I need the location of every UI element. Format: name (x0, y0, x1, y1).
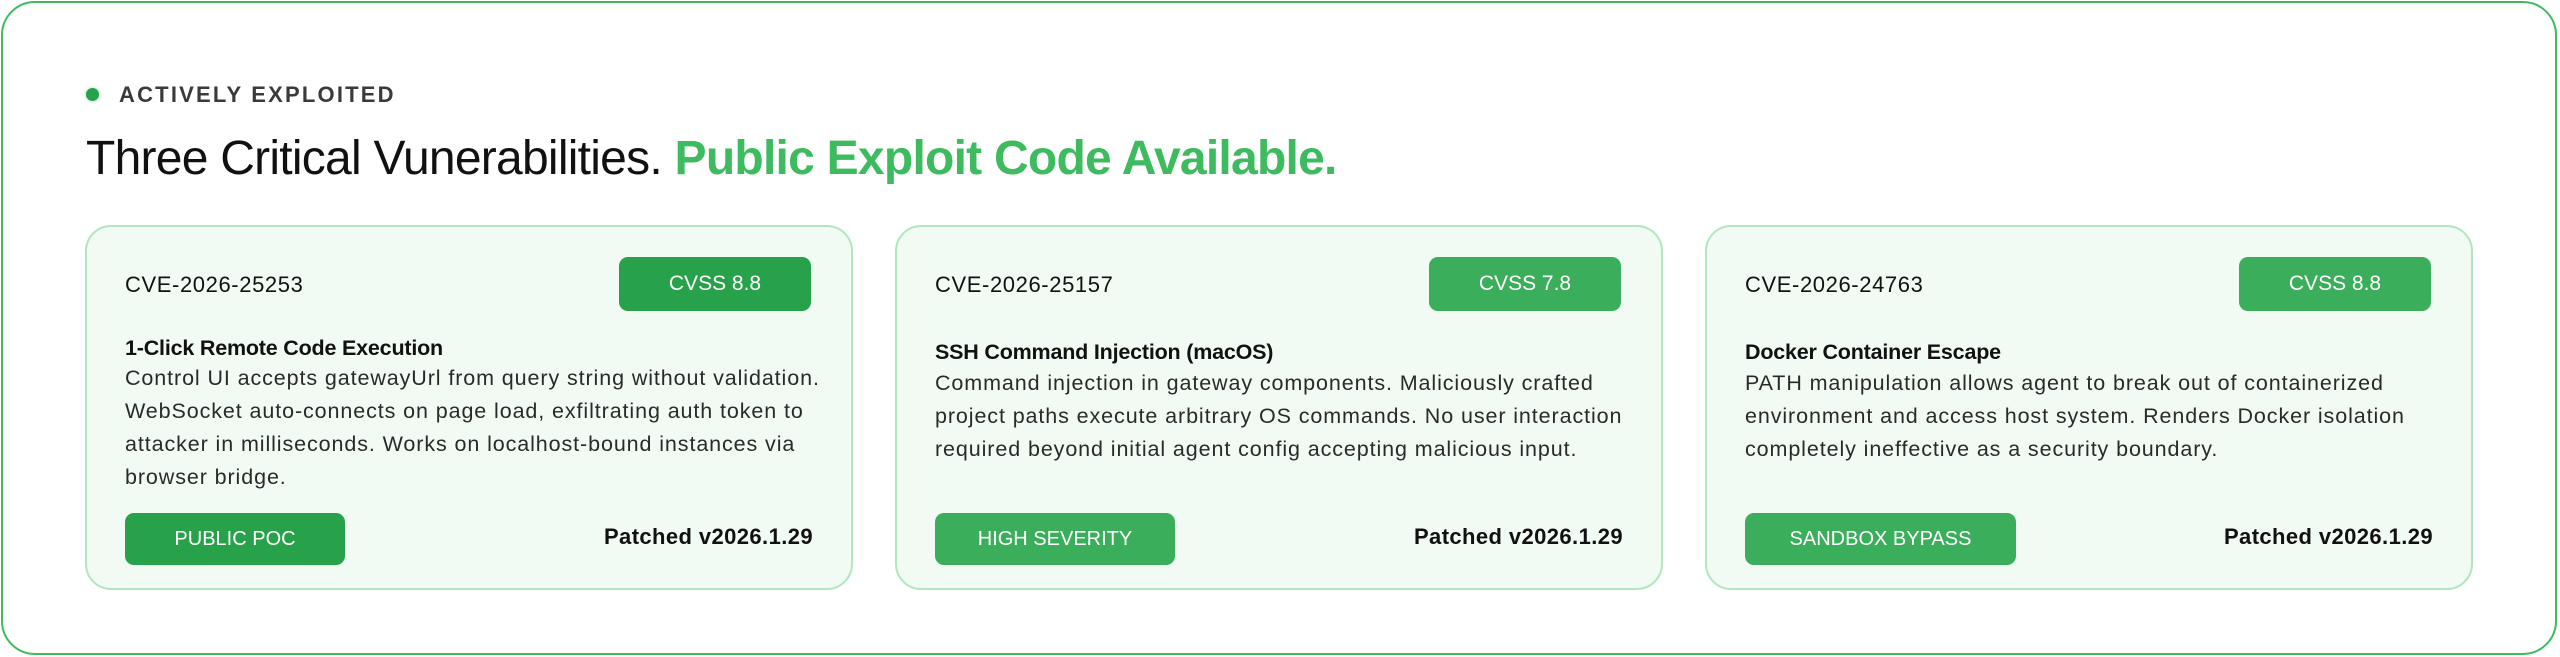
heading: 1-Click RCE: 1-Click Remote Code Execution (125, 336, 443, 360)
panel: CVE-2026-25253: CVE-2026-25253 (125, 272, 303, 297)
text block: project paths execute arbitrary OS commands. No user interaction (935, 404, 1622, 428)
panel: CVE-2026-25157: CVE-2026-25157 (935, 272, 1113, 297)
panel: CVE-2026-25157 (895, 225, 1663, 590)
text block (935, 371, 1622, 461)
text block (125, 366, 820, 489)
patched note: Patched v2026.1.29 (1414, 524, 1623, 549)
heading: docker escape: Docker Container Escape (1745, 340, 2001, 364)
text block: Control UI accepts gatewayUrl from query string without validation. (125, 366, 820, 390)
text block: attacker in milliseconds. Works on localhost-bound instances via (125, 432, 795, 456)
tag: public poc: PUBLIC POC (174, 528, 296, 550)
text block: PATH manipulation allows agent to break out of containerized (1745, 371, 2384, 395)
badge: CVSS 7.8 (1429, 257, 1621, 311)
badge: CVSS 8.8 (619, 257, 811, 311)
icon: green dot (86, 88, 99, 101)
heading: SSH command injection: SSH Command Injection (macOS) (935, 340, 1273, 364)
patched note: Patched v2026.1.29 (2224, 524, 2433, 549)
text block (1745, 371, 2405, 461)
text block: WebSocket auto-connects on page load, exfiltrating auth token to (125, 399, 804, 423)
text block: Command injection in gateway components. Maliciously crafted (935, 371, 1594, 395)
tag: sandbox bypass (1745, 513, 2016, 565)
tag: sandbox bypass: SANDBOX BYPASS (1790, 528, 1971, 550)
text block: environment and access host system. Renders Docker isolation (1745, 404, 2405, 428)
badge: CVSS 8.8 (2239, 257, 2431, 311)
badge: CVSS 7.8: CVSS 7.8 (1479, 272, 1571, 295)
tag: public poc (125, 513, 345, 565)
badge: CVSS 8.8: CVSS 8.8 (2289, 272, 2381, 295)
text block: completely ineffective as a security boundary. (1745, 437, 2218, 461)
text block: browser bridge. (125, 465, 287, 489)
title: Three Critical Vunerabilities. Public Exploit Code Available. (86, 132, 1337, 185)
panel: CVE-2026-25253 (85, 225, 853, 590)
panel: CVE-2026-24763: CVE-2026-24763 (1745, 272, 1923, 297)
text block: required beyond initial agent config accepting malicious input. (935, 437, 1577, 461)
label: actively exploited: ACTIVELY EXPLOITED (119, 82, 396, 107)
badge: CVSS 8.8: CVSS 8.8 (669, 272, 761, 295)
panel: CVE-2026-24763 (1705, 225, 2473, 590)
tag: high severity: HIGH SEVERITY (978, 528, 1132, 550)
tag: high severity (935, 513, 1175, 565)
patched note: Patched v2026.1.29 (604, 524, 813, 549)
